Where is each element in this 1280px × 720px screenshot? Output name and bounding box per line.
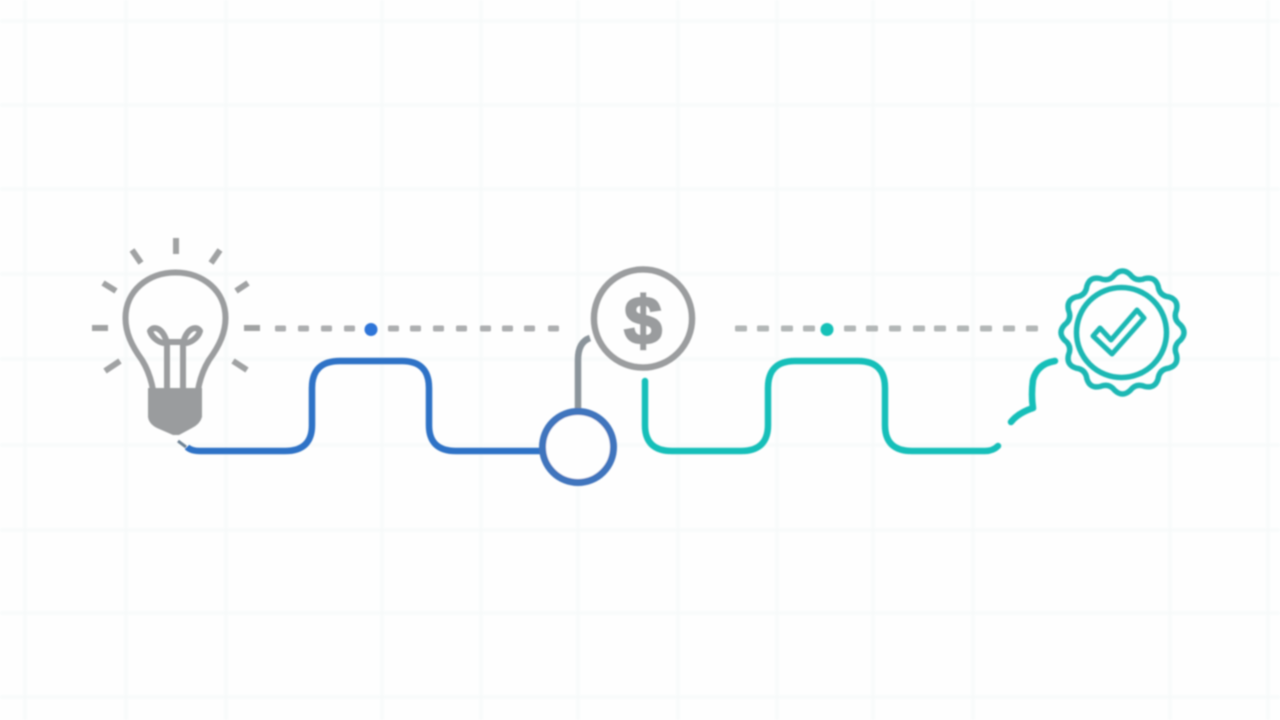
line start speck xyxy=(178,441,186,447)
badge check mark xyxy=(1093,310,1144,354)
teal dot xyxy=(820,323,834,336)
dollar sign: $ xyxy=(624,283,662,359)
bulb base xyxy=(148,388,202,435)
blue wave line xyxy=(187,361,541,451)
teal wave line xyxy=(645,361,998,451)
dashed connector: dollar to badge xyxy=(735,326,1038,332)
dashed connector: bulb to dollar xyxy=(275,326,559,332)
blue dot xyxy=(364,323,378,336)
grey connector to dollar xyxy=(578,338,590,410)
icon: approval badge xyxy=(1061,271,1184,394)
icon: light bulb xyxy=(92,238,260,435)
icon: dollar coin xyxy=(594,270,692,368)
badge scalloped edge xyxy=(1061,271,1184,394)
process flow diagram xyxy=(92,238,1184,482)
badge inner ring xyxy=(1076,288,1166,378)
bulb glass outline xyxy=(126,272,226,390)
teal line to badge xyxy=(1011,361,1055,422)
blue ring node xyxy=(542,412,614,482)
bulb rays xyxy=(92,238,260,371)
bulb filament xyxy=(150,328,200,390)
